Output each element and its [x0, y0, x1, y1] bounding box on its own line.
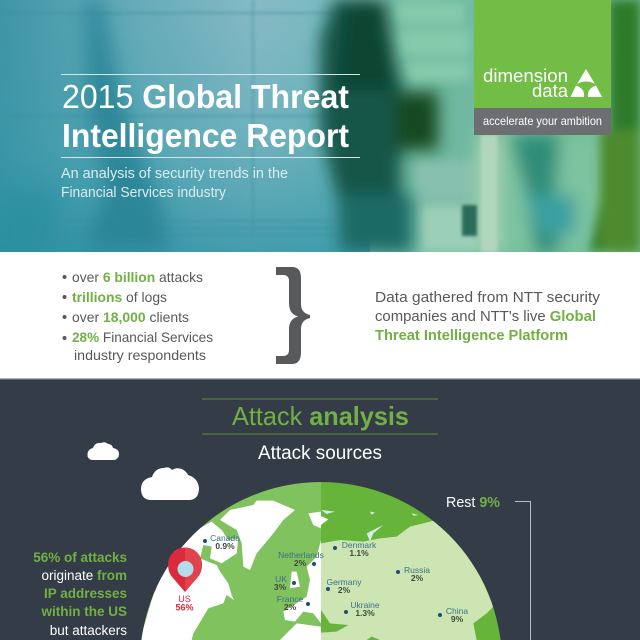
bullet list: over 6 billion attacks — [72, 269, 203, 285]
logo wordmark: dimension — [483, 66, 568, 86]
label: Ukraine — [344, 600, 380, 618]
heading: Attack analysis — [232, 401, 409, 431]
callout: US attacks: IP addresses — [44, 586, 127, 601]
callout: US attacks: 56% of attacks — [33, 550, 127, 565]
label: Ukraine: 1.3% — [355, 608, 375, 618]
callout: US attacks: within the US — [40, 604, 127, 619]
bullet list: over 18,000 clients — [72, 309, 189, 325]
icon: small cloud — [87, 442, 119, 460]
land: right hemisphere — [321, 510, 493, 640]
bullet list: 28% Financial Services — [72, 329, 213, 345]
bullet list: trillions of logs — [72, 289, 167, 305]
label: Denmark: Denmark — [342, 540, 377, 550]
callout: US attacks — [33, 550, 127, 638]
logo panel: dimension data — [474, 0, 611, 135]
label: Germany — [326, 577, 362, 595]
panel: attack analysis — [0, 378, 640, 640]
label: Denmark: 1.1% — [349, 548, 369, 558]
data source text: Data gathered from NTT security — [375, 290, 601, 306]
icon: logo triangles — [570, 69, 602, 97]
data source text: Threat Intelligence Platform — [375, 328, 568, 344]
label: China: 9% — [451, 614, 464, 624]
land: left hemisphere — [140, 501, 321, 640]
title line 2: Intelligence Report — [62, 117, 349, 154]
label: Canada: 0.9% — [215, 541, 235, 551]
subheading: Attack sources — [258, 443, 382, 464]
icon: large cloud — [141, 467, 199, 500]
callout: rest: Rest 9% — [446, 495, 500, 511]
label: UK — [274, 574, 296, 592]
country labels — [203, 533, 468, 624]
label: Russia: 2% — [411, 573, 424, 583]
callout: US attacks: but attackers — [50, 623, 127, 638]
bullet list — [62, 269, 213, 363]
label: Canada — [203, 533, 240, 551]
logo panel: dimension data: data — [532, 81, 569, 101]
label: France — [277, 594, 310, 612]
label: France: 2% — [284, 602, 297, 612]
label: Netherlands: 2% — [294, 558, 307, 568]
logo tagline: accelerate your ambition — [483, 114, 602, 128]
data source text: companies and NTT's live Global — [375, 309, 596, 325]
label: Germany: Germany — [327, 577, 362, 587]
hero title block — [61, 74, 360, 201]
label: US: 56% — [175, 602, 194, 612]
label: Ukraine: Ukraine — [350, 600, 380, 610]
label: China — [438, 606, 468, 624]
label: Netherlands: Netherlands — [278, 550, 324, 560]
bullet list: industry respondents — [74, 347, 206, 363]
hero title block: Financial Services industry — [61, 185, 227, 201]
subtitle: An analysis of security trends in the — [61, 166, 288, 182]
label: Russia: Russia — [404, 565, 430, 575]
label: Denmark — [333, 540, 377, 558]
title line 1: 2015 Global Threat — [62, 78, 349, 115]
label: US — [175, 594, 194, 612]
panel: data summary — [0, 252, 640, 379]
label: Russia — [396, 565, 430, 583]
hero photo background — [0, 0, 640, 252]
label: China: China — [446, 606, 468, 616]
label: Canada: Canada — [210, 533, 240, 543]
label: France: France — [277, 594, 303, 604]
bracket line — [515, 502, 530, 640]
brace — [276, 267, 310, 364]
label: UK: 3% — [274, 582, 287, 592]
globe map — [142, 482, 500, 640]
data source text — [375, 290, 601, 344]
callout: US attacks: originate from — [41, 568, 127, 583]
label: Germany: 2% — [338, 585, 351, 595]
label: UK: UK — [275, 574, 287, 584]
label: US: US — [178, 594, 191, 604]
label: Netherlands — [278, 550, 324, 568]
icon: US map pin — [168, 548, 202, 592]
